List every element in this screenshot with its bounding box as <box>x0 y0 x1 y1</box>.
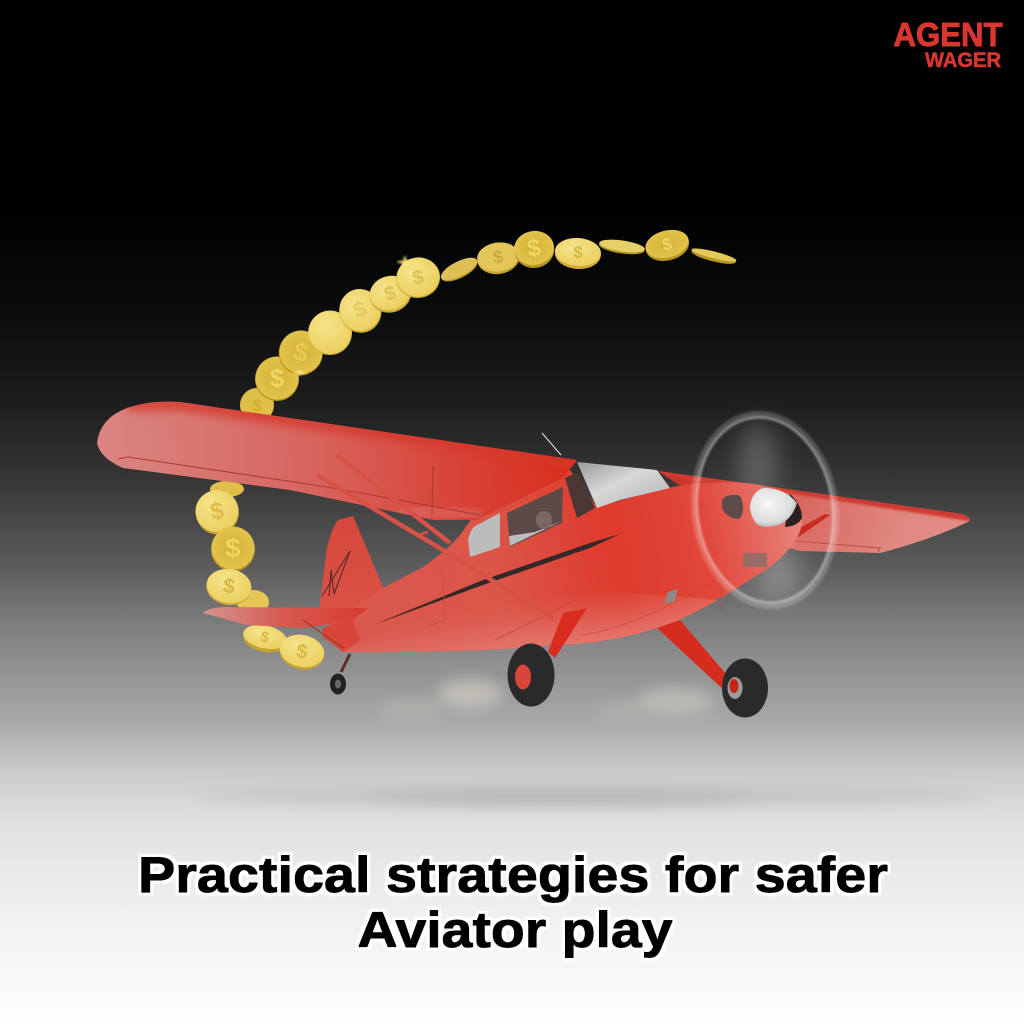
coin 21 <box>276 631 327 674</box>
main wing <box>97 402 577 520</box>
coin 17 <box>211 526 255 572</box>
wing aileron line <box>118 457 480 515</box>
logo <box>894 16 1002 72</box>
smoke trails <box>378 679 713 721</box>
coin 2 <box>255 356 299 401</box>
main gear leg <box>548 608 587 658</box>
rudder lower <box>323 618 360 652</box>
propeller blade blur <box>738 422 800 598</box>
tail fin mark <box>322 551 350 596</box>
spinner <box>750 488 797 527</box>
coin 6: $ <box>382 282 398 306</box>
coin 16: $ <box>208 497 227 526</box>
coin 5 <box>333 283 388 339</box>
coin 20 <box>240 621 289 656</box>
logo wordmark: AGENT: AGENT <box>894 16 1002 53</box>
engine intake <box>722 495 743 519</box>
coin 9: $ <box>492 246 504 268</box>
fuselage belly highlight <box>343 590 718 652</box>
nose gear leg <box>657 620 737 693</box>
title <box>138 847 888 958</box>
coin 17: $ <box>225 533 241 563</box>
coin 7: $ <box>411 266 426 290</box>
coin 19 <box>204 566 254 608</box>
coin 11: $ <box>573 243 584 262</box>
coin 1 <box>240 388 274 422</box>
antenna <box>542 433 561 455</box>
tail wheel <box>330 654 350 694</box>
coin 5: $ <box>350 296 370 323</box>
coin 12 <box>598 237 646 257</box>
coin 2: $ <box>270 363 285 393</box>
logo wordmark: WAGER: WAGER <box>925 49 1001 72</box>
rear side window <box>468 513 500 557</box>
nose cavity <box>785 494 802 527</box>
nose wheel <box>722 658 768 718</box>
coin 19: $ <box>222 574 237 599</box>
coin 10 <box>512 228 557 271</box>
airplane <box>90 395 980 718</box>
coin 16 <box>192 487 242 538</box>
lower vent <box>716 596 726 610</box>
tail fin <box>320 516 384 625</box>
coin 6 <box>365 271 415 317</box>
coin 10: $ <box>526 234 543 263</box>
ground shadow <box>190 789 990 805</box>
coin 8 <box>438 253 481 286</box>
coin 9 <box>475 240 521 277</box>
coin 1: $ <box>252 396 262 415</box>
coin 7 sparkle <box>397 256 417 270</box>
cowl vent <box>743 553 767 567</box>
horizontal stabilizer <box>203 607 368 628</box>
fuselage stripe <box>373 534 620 625</box>
coin sparkle <box>292 370 308 376</box>
coin 11 <box>554 236 602 271</box>
coin 21: $ <box>294 640 310 664</box>
stabilizer brace <box>303 620 343 648</box>
propeller ring <box>682 405 848 615</box>
front side window <box>565 472 595 518</box>
wing struts <box>317 455 553 618</box>
title line 1: Practical strategies for safer <box>138 847 888 903</box>
fuselage <box>323 470 802 652</box>
far wing aileron line <box>795 541 880 552</box>
coin 14 <box>690 246 737 267</box>
door panel lines <box>428 532 720 640</box>
coin 7 <box>393 254 443 302</box>
coin 15 <box>210 481 244 497</box>
coin 13: $ <box>660 234 675 255</box>
coin 3: $ <box>290 336 312 368</box>
coin 18 <box>237 590 269 614</box>
windshield <box>577 462 670 508</box>
middle side window <box>507 487 563 547</box>
exhaust pipe <box>665 589 678 603</box>
coin trail <box>192 226 737 674</box>
coin 13 <box>642 226 692 265</box>
coin 4 <box>308 310 352 355</box>
title line 2: Aviator play <box>358 902 673 958</box>
far wing <box>658 471 970 553</box>
coin 3 <box>274 326 328 380</box>
coin 20: $ <box>259 628 271 647</box>
main wheel <box>508 644 554 706</box>
far wing strut <box>792 514 830 538</box>
